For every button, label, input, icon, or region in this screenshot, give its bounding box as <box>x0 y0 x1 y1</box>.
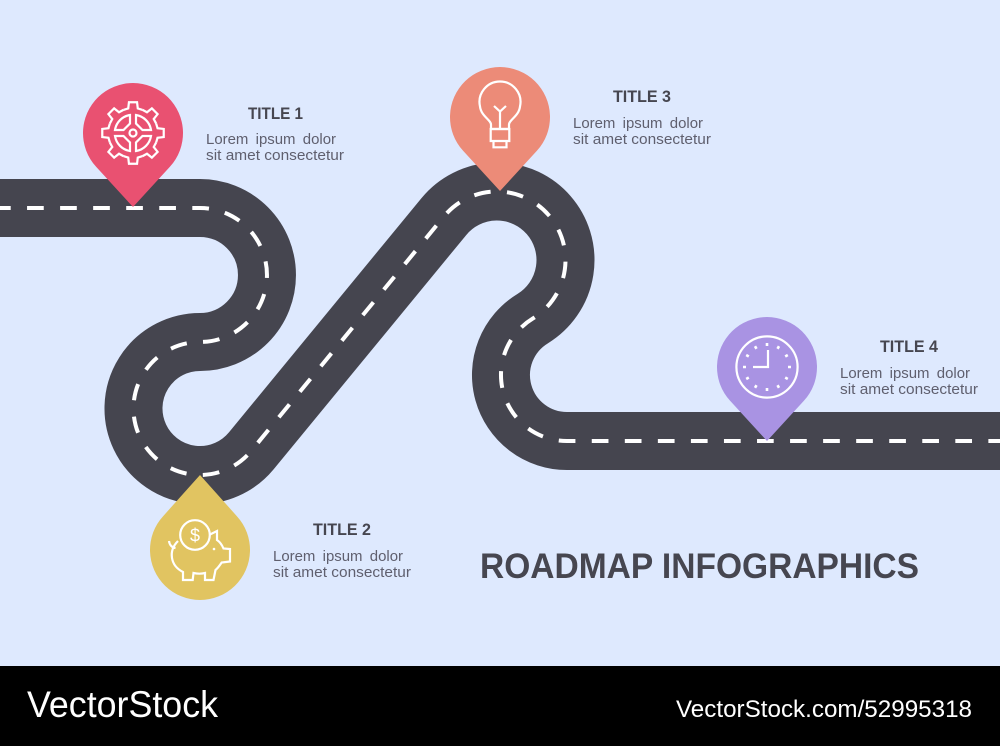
text block: title 1: TITLE 1 <box>248 104 303 123</box>
pin 3: light bulb <box>450 67 550 191</box>
text block: title 4: sit amet consectetur <box>840 382 978 398</box>
text block: title 2 <box>273 520 411 581</box>
text block: title 3 <box>573 87 711 148</box>
footer bar <box>0 666 1000 746</box>
pin 4: clock <box>717 317 817 441</box>
pin 1: gear <box>83 83 183 207</box>
icon: light bulb <box>480 81 520 147</box>
text block: title 1: Lorem ipsum dolor <box>206 132 336 148</box>
text block: title 3: Lorem ipsum dolor <box>573 116 703 132</box>
text block: title 3: sit amet consectetur <box>573 132 711 148</box>
icon: piggy bank: $ <box>190 526 200 546</box>
text block: title 2: sit amet consectetur <box>273 565 411 581</box>
text block: title 2: TITLE 2 <box>313 520 371 539</box>
icon: gear <box>102 102 164 164</box>
text block: title 2: Lorem ipsum dolor <box>273 549 403 565</box>
text block: title 4: Lorem ipsum dolor <box>840 366 970 382</box>
icon: clock <box>736 336 798 398</box>
pin 2: piggy bank <box>150 475 250 600</box>
text block: title 1 <box>206 104 344 164</box>
text block: title 4: TITLE 4 <box>880 337 939 356</box>
main heading: ROADMAP INFOGRAPHICS <box>480 547 919 586</box>
footer brand: VectorStock <box>27 684 218 725</box>
text block: title 4 <box>840 337 978 398</box>
text block: title 1: sit amet consectetur <box>206 148 344 164</box>
winding road <box>0 191 1000 475</box>
footer image id: VectorStock.com/52995318 <box>676 696 972 723</box>
text block: title 3: TITLE 3 <box>613 87 671 106</box>
